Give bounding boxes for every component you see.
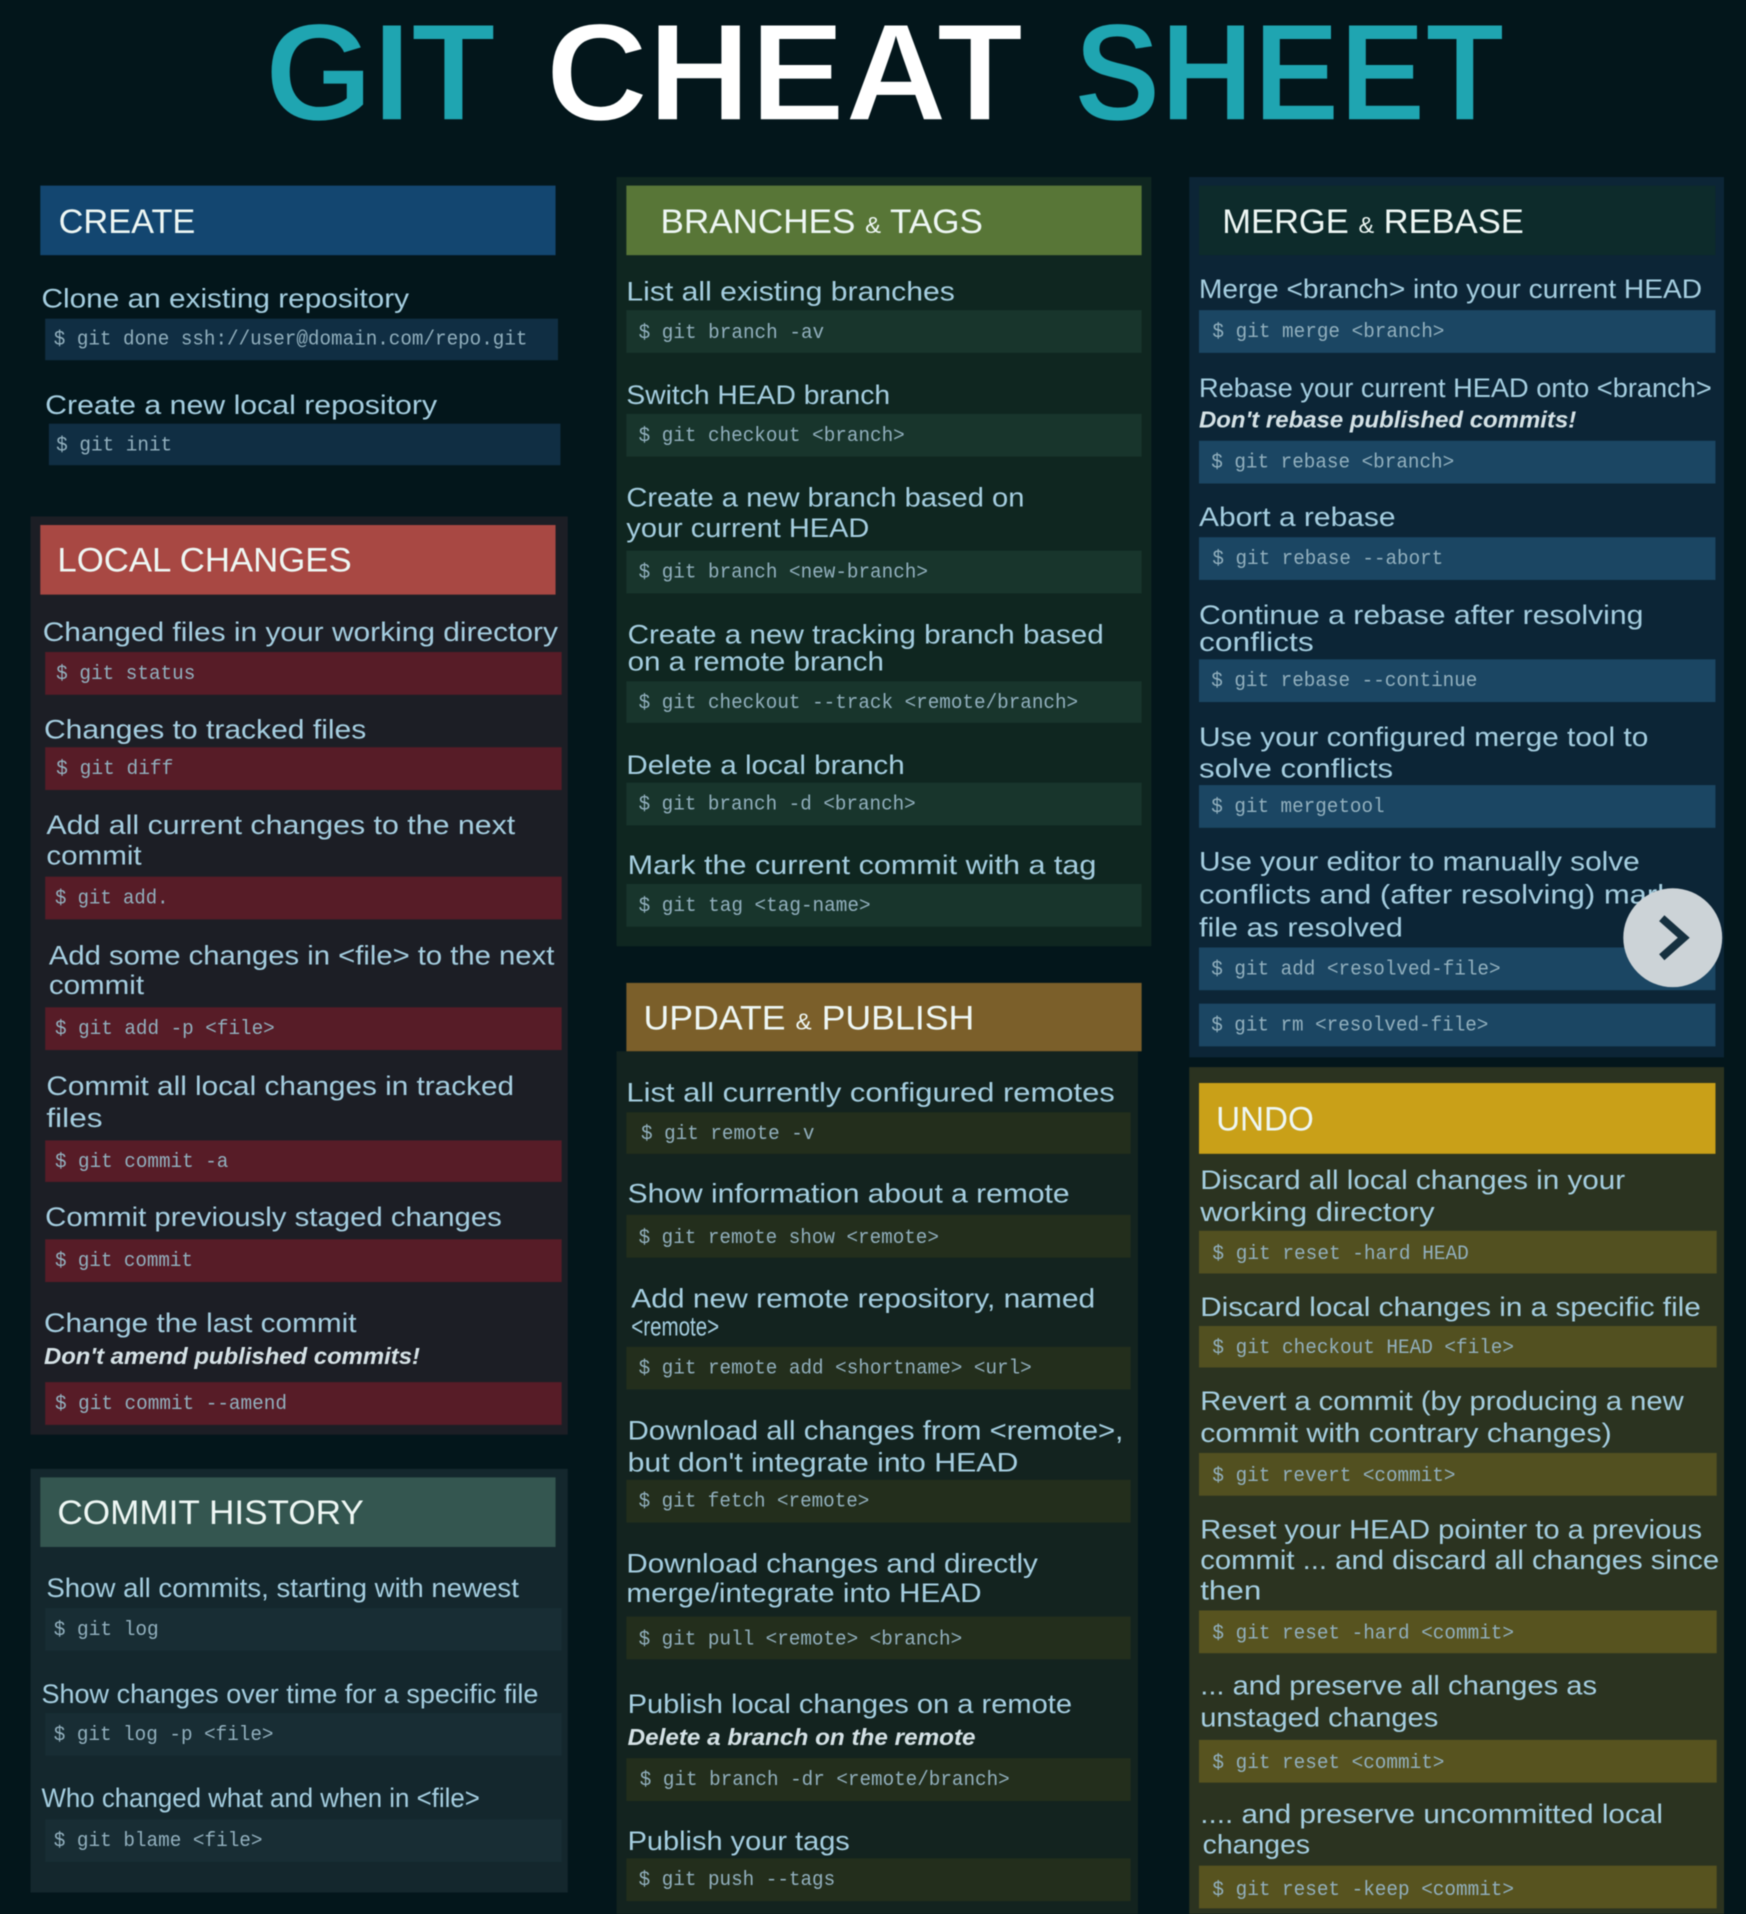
- entry: git rebase: $ git rebase <branch>: [1211, 452, 1454, 475]
- entry: git checkout: $ git checkout <branch>: [639, 425, 905, 448]
- entry: git checkout HEAD file: $ git checkout HEAD <file>: [1212, 1337, 1514, 1360]
- entry: git log: $ git log: [54, 1619, 159, 1642]
- entry: git checkout HEAD file: [1199, 1292, 1717, 1367]
- heading: undo: [1199, 1083, 1715, 1154]
- entry: git reset keep: .... and preserve uncommitted local: [1200, 1799, 1663, 1829]
- entry: git reset hard commit: [1199, 1514, 1719, 1653]
- entry: git status: $ git status: [56, 663, 195, 686]
- entry: git commit amend: Change the last commit: [44, 1308, 357, 1338]
- heading: undo: UNDO: [1216, 1101, 1314, 1139]
- entry: git rebase: [1199, 373, 1715, 484]
- entry: git status: [43, 617, 562, 695]
- entry: git branch -dr: Publish local changes on a remote: [628, 1689, 1072, 1719]
- entry: git blame: $ git blame <file>: [54, 1830, 263, 1853]
- entry: git rebase abort: Abort a rebase: [1199, 502, 1396, 532]
- entry: git remote -v: [626, 1077, 1131, 1154]
- heading: branches and tags: [626, 186, 1142, 255]
- entry: git branch -d: [626, 750, 1142, 825]
- entry: git rebase continue: conflicts: [1199, 627, 1314, 657]
- entry: git reset keep: $ git reset -keep <commit>: [1212, 1879, 1514, 1902]
- entry: git checkout track: Create a new tracking branch based: [628, 619, 1104, 649]
- heading: update and publish: [626, 983, 1142, 1051]
- entry: git remote show: $ git remote show <remote>: [639, 1227, 939, 1250]
- entry: git revert: $ git revert <commit>: [1212, 1465, 1455, 1488]
- entry: git reset hard commit: $ git reset -hard <commit>: [1212, 1623, 1514, 1646]
- entry: git commit amend: [44, 1308, 562, 1425]
- entry: git remote -v: List all currently configured remotes: [626, 1077, 1115, 1107]
- entry: git remote show: [626, 1179, 1131, 1258]
- entry: manually solve conflicts: file as resolved: [1199, 912, 1403, 942]
- entry: git tag: $ git tag <tag-name>: [639, 895, 871, 918]
- entry: git diff: [44, 715, 562, 790]
- entry: git merge: [1199, 274, 1715, 353]
- entry: clone repository: [42, 284, 558, 360]
- entry: git blame: Who changed what and when in <file>: [42, 1783, 480, 1813]
- entry: git remote add: [626, 1284, 1131, 1389]
- entry: git rebase continue: [1199, 600, 1715, 702]
- entry: git remote add: Add new remote repository, named: [631, 1284, 1095, 1314]
- entry: git remote add: $ git remote add <shortname> <url>: [639, 1358, 1032, 1381]
- entry: git commit: $ git commit: [55, 1250, 193, 1273]
- entry: git commit: [45, 1202, 562, 1282]
- entry: git reset hard HEAD: $ git reset -hard HEAD: [1212, 1243, 1469, 1266]
- entry: clone repository: $ git done ssh://user@domain.com/repo.git: [54, 328, 527, 351]
- entry: git revert: [1199, 1386, 1717, 1496]
- entry: git mergetool: $ git mergetool: [1211, 796, 1385, 819]
- entry: git commit amend: $ git commit --amend: [55, 1393, 287, 1416]
- entry: git remote add: <remote>: [631, 1312, 719, 1342]
- entry: git pull: Download changes and directly: [626, 1549, 1038, 1579]
- panel: create: [40, 186, 560, 465]
- title: [265, 0, 1504, 150]
- entry: git reset commit: unstaged changes: [1200, 1702, 1438, 1732]
- heading: branches and tags: BRANCHES & TAGS: [661, 203, 983, 241]
- entry: git remote show: Show information about a remote: [628, 1179, 1070, 1209]
- entry: git branch -d: $ git branch -d <branch>: [639, 794, 916, 817]
- entry: new local repository: $ git init: [56, 435, 172, 458]
- panel: undo: [1189, 1067, 1724, 1914]
- entry: git push tags: [626, 1826, 1131, 1901]
- entry: git checkout: Switch HEAD branch: [626, 380, 890, 410]
- entry: git add -p: [45, 941, 562, 1050]
- entry: git reset hard commit: Reset your HEAD pointer to a previous: [1200, 1514, 1702, 1544]
- entry: git add -p: $ git add -p <file>: [55, 1018, 275, 1041]
- entry: git rebase abort: [1199, 502, 1715, 580]
- entry: clone repository: Clone an existing repository: [42, 284, 410, 314]
- entry: git fetch: [626, 1416, 1131, 1523]
- entry: git branch -dr: Delete a branch on the remote: [628, 1724, 976, 1750]
- entry: manually solve conflicts: conflicts and (after resolving) mark: [1199, 880, 1673, 910]
- heading: create: CREATE: [59, 203, 195, 241]
- entry: git rebase: Don't rebase published commits!: [1199, 406, 1577, 432]
- entry: git mergetool: solve conflicts: [1199, 754, 1393, 784]
- entry: git remote -v: $ git remote -v: [641, 1123, 814, 1146]
- entry: new local repository: Create a new local repository: [45, 390, 438, 420]
- entry: git push tags: $ git push --tags: [639, 1869, 835, 1892]
- entry: git branch new: $ git branch <new-branch>: [639, 562, 928, 585]
- entry: git branch -d: Delete a local branch: [626, 750, 905, 780]
- panel: local changes: [31, 516, 568, 1435]
- entry: git revert: commit with contrary changes): [1200, 1418, 1612, 1448]
- entry: manually solve conflicts: [1199, 847, 1715, 1046]
- entry: git rebase: Rebase your current HEAD onto <branch>: [1199, 373, 1712, 403]
- entry: git checkout track: [626, 619, 1142, 723]
- heading: commit history: [40, 1477, 556, 1547]
- entry: git add -p: commit: [49, 970, 145, 1000]
- entry: git log: Show all commits, starting with newest: [46, 1573, 519, 1603]
- entry: git reset hard commit: commit ... and discard all changes since: [1200, 1545, 1719, 1575]
- heading: create: [40, 186, 556, 255]
- entry: git commit -a: files: [46, 1103, 103, 1133]
- entry: git branch -dr: [626, 1689, 1131, 1801]
- entry: git rebase continue: Continue a rebase after resolving: [1199, 600, 1643, 630]
- entry: git pull: merge/integrate into HEAD: [626, 1578, 982, 1608]
- entry: git fetch: Download all changes from <remote>,: [628, 1416, 1123, 1446]
- entry: git reset commit: ... and preserve all changes as: [1200, 1671, 1597, 1701]
- entry: manually solve conflicts: $ git rm <resolved-file>: [1211, 1015, 1488, 1038]
- entry: manually solve conflicts: Use your editor to manually solve: [1199, 847, 1640, 877]
- heading: commit history: COMMIT HISTORY: [57, 1494, 364, 1532]
- entry: git mergetool: Use your configured merge tool to: [1199, 722, 1648, 752]
- panel: merge and rebase: [1189, 177, 1724, 1057]
- entry: git checkout track: $ git checkout --track <remote/branch>: [639, 692, 1078, 715]
- entry: git push tags: Publish your tags: [628, 1826, 850, 1856]
- panel: commit history: [31, 1469, 568, 1893]
- entry: git merge: $ git merge <branch>: [1212, 321, 1444, 344]
- entry: git commit amend: Don't amend published commits!: [44, 1343, 420, 1369]
- entry: git mergetool: [1199, 722, 1715, 828]
- entry: git branch new: [626, 483, 1142, 593]
- entry: git reset hard HEAD: [1199, 1165, 1717, 1273]
- entry: git reset keep: [1199, 1799, 1717, 1908]
- entry: git checkout track: on a remote branch: [628, 646, 884, 676]
- entry: git checkout: [626, 380, 1142, 457]
- heading: merge and rebase: MERGE & REBASE: [1222, 203, 1524, 241]
- entry: new local repository: [45, 390, 560, 465]
- entry: git reset hard HEAD: working directory: [1199, 1197, 1435, 1227]
- entry: git add: Add all current changes to the next: [46, 810, 516, 840]
- entry: git add: $ git add.: [55, 888, 168, 911]
- entry: git commit: Commit previously staged changes: [45, 1202, 502, 1232]
- entry: git log: [45, 1573, 562, 1651]
- entry: git commit -a: [45, 1071, 562, 1182]
- entry: git add: commit: [46, 840, 142, 870]
- entry: git pull: $ git pull <remote> <branch>: [639, 1629, 962, 1652]
- entry: git reset commit: $ git reset <commit>: [1212, 1752, 1444, 1775]
- icon: next arrow button: [1623, 888, 1722, 987]
- entry: git rebase continue: $ git rebase --continue: [1211, 670, 1477, 693]
- entry: git log -p: Show changes over time for a specific file: [42, 1679, 538, 1709]
- entry: git status: Changed files in your working directory: [43, 617, 559, 647]
- entry: git branch -av: List all existing branches: [626, 276, 955, 306]
- entry: git branch -dr: $ git branch -dr <remote/branch>: [640, 1769, 1010, 1792]
- entry: git reset hard HEAD: Discard all local changes in your: [1200, 1165, 1625, 1195]
- entry: manually solve conflicts: $ git add <resolved-file>: [1211, 958, 1501, 981]
- entry: git pull: [626, 1549, 1131, 1659]
- entry: git fetch: but don't integrate into HEAD: [628, 1447, 1018, 1477]
- panel: update and publish: [617, 983, 1142, 1914]
- entry: git add: [45, 810, 562, 919]
- entry: git tag: Mark the current commit with a tag: [628, 850, 1096, 880]
- entry: git reset commit: [1199, 1671, 1717, 1783]
- entry: git reset keep: changes: [1203, 1829, 1310, 1859]
- panel: branches and tags: [617, 177, 1151, 946]
- entry: git blame: [42, 1783, 562, 1862]
- heading: local changes: LOCAL CHANGES: [57, 541, 352, 579]
- entry: git fetch: $ git fetch <remote>: [639, 1491, 869, 1514]
- entry: git branch new: your current HEAD: [626, 513, 869, 543]
- heading: merge and rebase: [1199, 186, 1715, 255]
- entry: git merge: Merge <branch> into your current HEAD: [1199, 274, 1702, 304]
- entry: git branch -av: $ git branch -av: [639, 322, 824, 345]
- entry: git commit -a: Commit all local changes in tracked: [46, 1071, 514, 1101]
- entry: git log -p: [42, 1679, 562, 1756]
- entry: git diff: Changes to tracked files: [44, 715, 366, 745]
- entry: git tag: [626, 850, 1142, 927]
- entry: git branch -av: [626, 276, 1142, 353]
- entry: git commit -a: $ git commit -a: [55, 1151, 228, 1174]
- entry: git reset hard commit: then: [1200, 1575, 1261, 1605]
- entry: git revert: Revert a commit (by producing a new: [1200, 1386, 1684, 1416]
- entry: git rebase abort: $ git rebase --abort: [1212, 548, 1443, 571]
- entry: git checkout HEAD file: Discard local changes in a specific file: [1200, 1292, 1701, 1322]
- heading: local changes: [40, 525, 556, 595]
- entry: git log -p: $ git log -p <file>: [54, 1724, 273, 1747]
- entry: git add -p: Add some changes in <file> to the next: [49, 941, 555, 971]
- heading: update and publish: UPDATE & PUBLISH: [643, 999, 974, 1037]
- entry: git branch new: Create a new branch based on: [626, 483, 1024, 513]
- entry: git diff: $ git diff: [56, 758, 173, 781]
